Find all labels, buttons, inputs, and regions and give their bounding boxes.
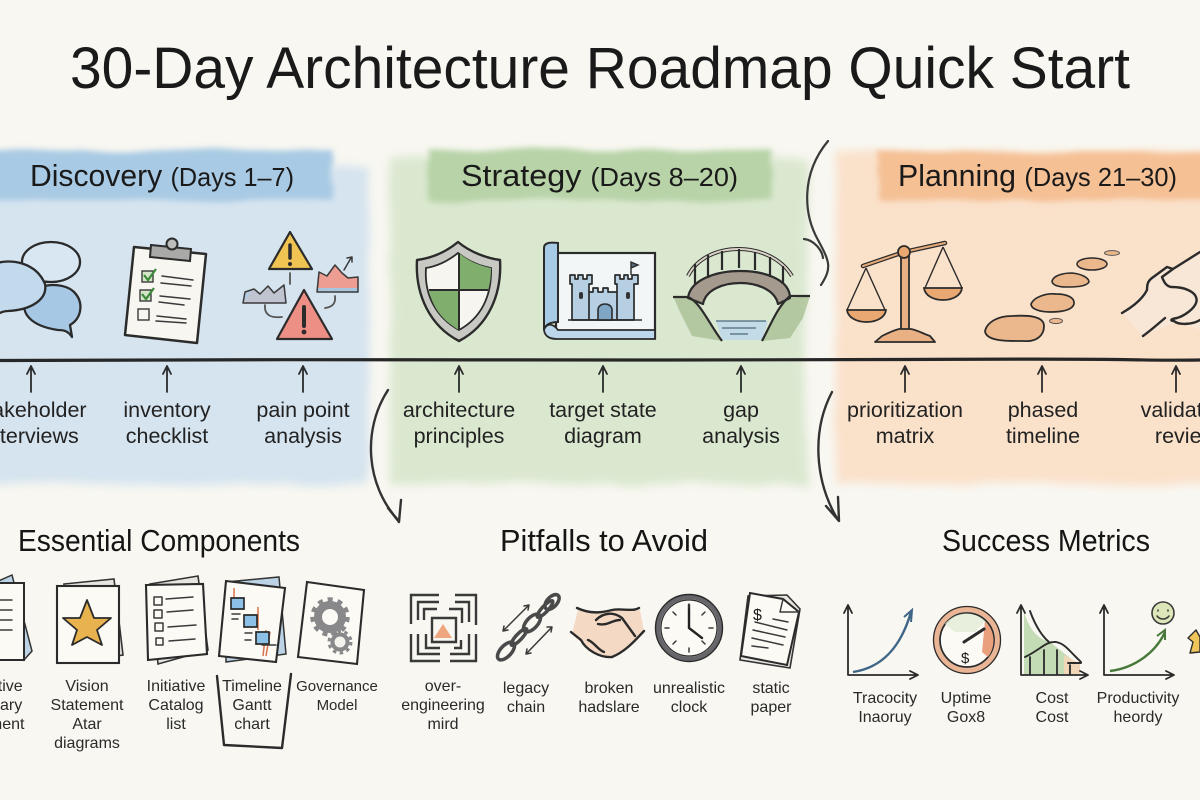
label: inventory checklist: inventory (123, 398, 211, 422)
discovery heading: Discovery (Days 1–7) (30, 158, 294, 193)
label: productivity: heordy (1114, 709, 1162, 726)
label: over-engineering: engineering (401, 697, 485, 714)
icon: vision star document (57, 579, 123, 663)
strategy header brush band (428, 150, 773, 200)
chart: productivity curve with smiley (1100, 602, 1174, 679)
planning heading: Planning (Days 21–30) (898, 158, 1177, 193)
label: productivity: Productivity (1097, 690, 1179, 707)
arrow: phased timeline (1038, 366, 1046, 392)
icon: summary document (0, 575, 32, 660)
label: unrealistic clock: unrealistic (653, 680, 725, 697)
icon: stone bridge (673, 249, 810, 341)
arrow: discovery to pitfalls (371, 390, 401, 522)
icon: speech bubbles (0, 242, 80, 337)
icon: static paper (740, 593, 800, 668)
discovery wash background (0, 166, 368, 484)
icon: maze (411, 595, 476, 661)
section: success metrics (844, 523, 1200, 726)
chart: velocity curve (844, 605, 918, 679)
label: architecture principles: architecture (403, 398, 515, 422)
icon: shield (417, 242, 500, 341)
icon: broken handshake (571, 608, 644, 658)
icon: balance scale (847, 243, 962, 342)
label: timeline gantt chart: Gantt (232, 697, 272, 714)
label: timeline gantt chart (217, 674, 291, 748)
icon: unrealistic clock (656, 594, 722, 662)
panel: planning (836, 152, 1200, 484)
label: gap analysis: analysis (702, 424, 780, 448)
label: uptime: Uptime (941, 690, 991, 707)
label: vision statement: Vision (65, 678, 109, 695)
label: prioritization matrix: prioritization (847, 398, 963, 422)
label: initiative catalog: Initiative (147, 678, 205, 695)
label: vision statement: diagrams (54, 735, 120, 752)
label: governance model: Model (317, 697, 357, 714)
label: target state diagram: target state (549, 398, 657, 422)
arrow: architecture principles (455, 366, 463, 392)
label: legacy chain: legacy (503, 680, 549, 697)
strategy heading: Strategy (Days 8–20) (461, 158, 738, 193)
arrow: stakeholder interviews (27, 366, 35, 392)
icon: castle blueprint (544, 243, 655, 339)
icon: gantt document (219, 577, 286, 662)
icon: clipboard checklist (125, 238, 206, 343)
label: initiative catalog: list (166, 716, 186, 733)
planning header brush band (878, 152, 1200, 200)
chart: uptime gauge: $ (961, 650, 970, 667)
label: architecture principles: principles (414, 424, 504, 448)
label: pain point analysis: pain point (256, 398, 350, 422)
title: 30-Day Architecture Roadmap Quick Start (70, 36, 1130, 101)
heading: essential components: Essential Components (18, 523, 300, 558)
label: pain point analysis: analysis (264, 424, 342, 448)
panel: strategy (390, 150, 810, 484)
label: legacy chain: chain (507, 699, 545, 716)
heading: pitfalls to avoid: Pitfalls to Avoid (500, 523, 708, 558)
label: target state diagram: diagram (564, 424, 642, 448)
icon: legacy chain (494, 592, 562, 663)
arrow: curved connector strategy to planning (804, 141, 828, 285)
arrow: validation review (1172, 366, 1180, 392)
chart: cost curve (1017, 605, 1088, 679)
arrow: inventory checklist (163, 366, 171, 392)
arrow: prioritization matrix (901, 366, 909, 392)
label: phased timeline: timeline (1006, 424, 1080, 448)
icon: pain point warnings (243, 232, 358, 339)
label: uptime: Gox8 (947, 709, 985, 726)
label: initiative catalog: Catalog (148, 697, 204, 714)
label: prioritization matrix: matrix (876, 424, 935, 448)
icon: partial star (1188, 630, 1200, 653)
label: unrealistic clock: clock (671, 699, 708, 716)
arrow: strategy to metrics (818, 392, 839, 521)
label: over-engineering: over- (425, 678, 461, 695)
label: broken handshake: hadslare (578, 699, 640, 716)
label: timeline gantt chart: chart (234, 716, 270, 733)
icon: stepping stones (985, 251, 1120, 341)
planning wash background (836, 152, 1200, 484)
label: vision statement: Atar (72, 716, 102, 733)
heading: success metrics: Success Metrics (942, 523, 1150, 558)
label: broken handshake: broken (585, 680, 633, 697)
label: cost: Cost (1036, 709, 1069, 726)
label: inventory checklist: checklist (126, 424, 208, 448)
label: static paper: static (752, 680, 790, 697)
icon: clasped hands (1122, 252, 1200, 336)
section: essential components (0, 523, 378, 752)
icon: static paper: $ (753, 607, 762, 624)
label: static paper: paper (751, 699, 792, 716)
arrow: pain point analysis (299, 366, 307, 392)
label: velocity: Tracocity (853, 690, 917, 707)
label: over-engineering: mird (427, 716, 459, 733)
discovery header brush band (0, 150, 332, 200)
label: cost: Cost (1036, 690, 1069, 707)
icon: catalog list document (146, 576, 208, 664)
label: timeline gantt chart: Timeline (222, 678, 282, 695)
strategy wash background (390, 158, 806, 484)
section: pitfalls to avoid (401, 523, 800, 733)
panel: discovery (0, 150, 368, 484)
label: governance model: Governance (296, 678, 378, 695)
arrow: target state diagram (599, 366, 607, 392)
label: velocity: Inaoruy (858, 709, 912, 726)
icon: governance gears document (298, 582, 364, 664)
chart: uptime gauge (934, 606, 1000, 674)
label: gap analysis: gap (723, 398, 759, 422)
arrow: gap analysis (737, 366, 745, 392)
label: vision statement: Statement (51, 697, 124, 714)
label: phased timeline: phased (1008, 398, 1078, 422)
timeline (0, 359, 1200, 360)
